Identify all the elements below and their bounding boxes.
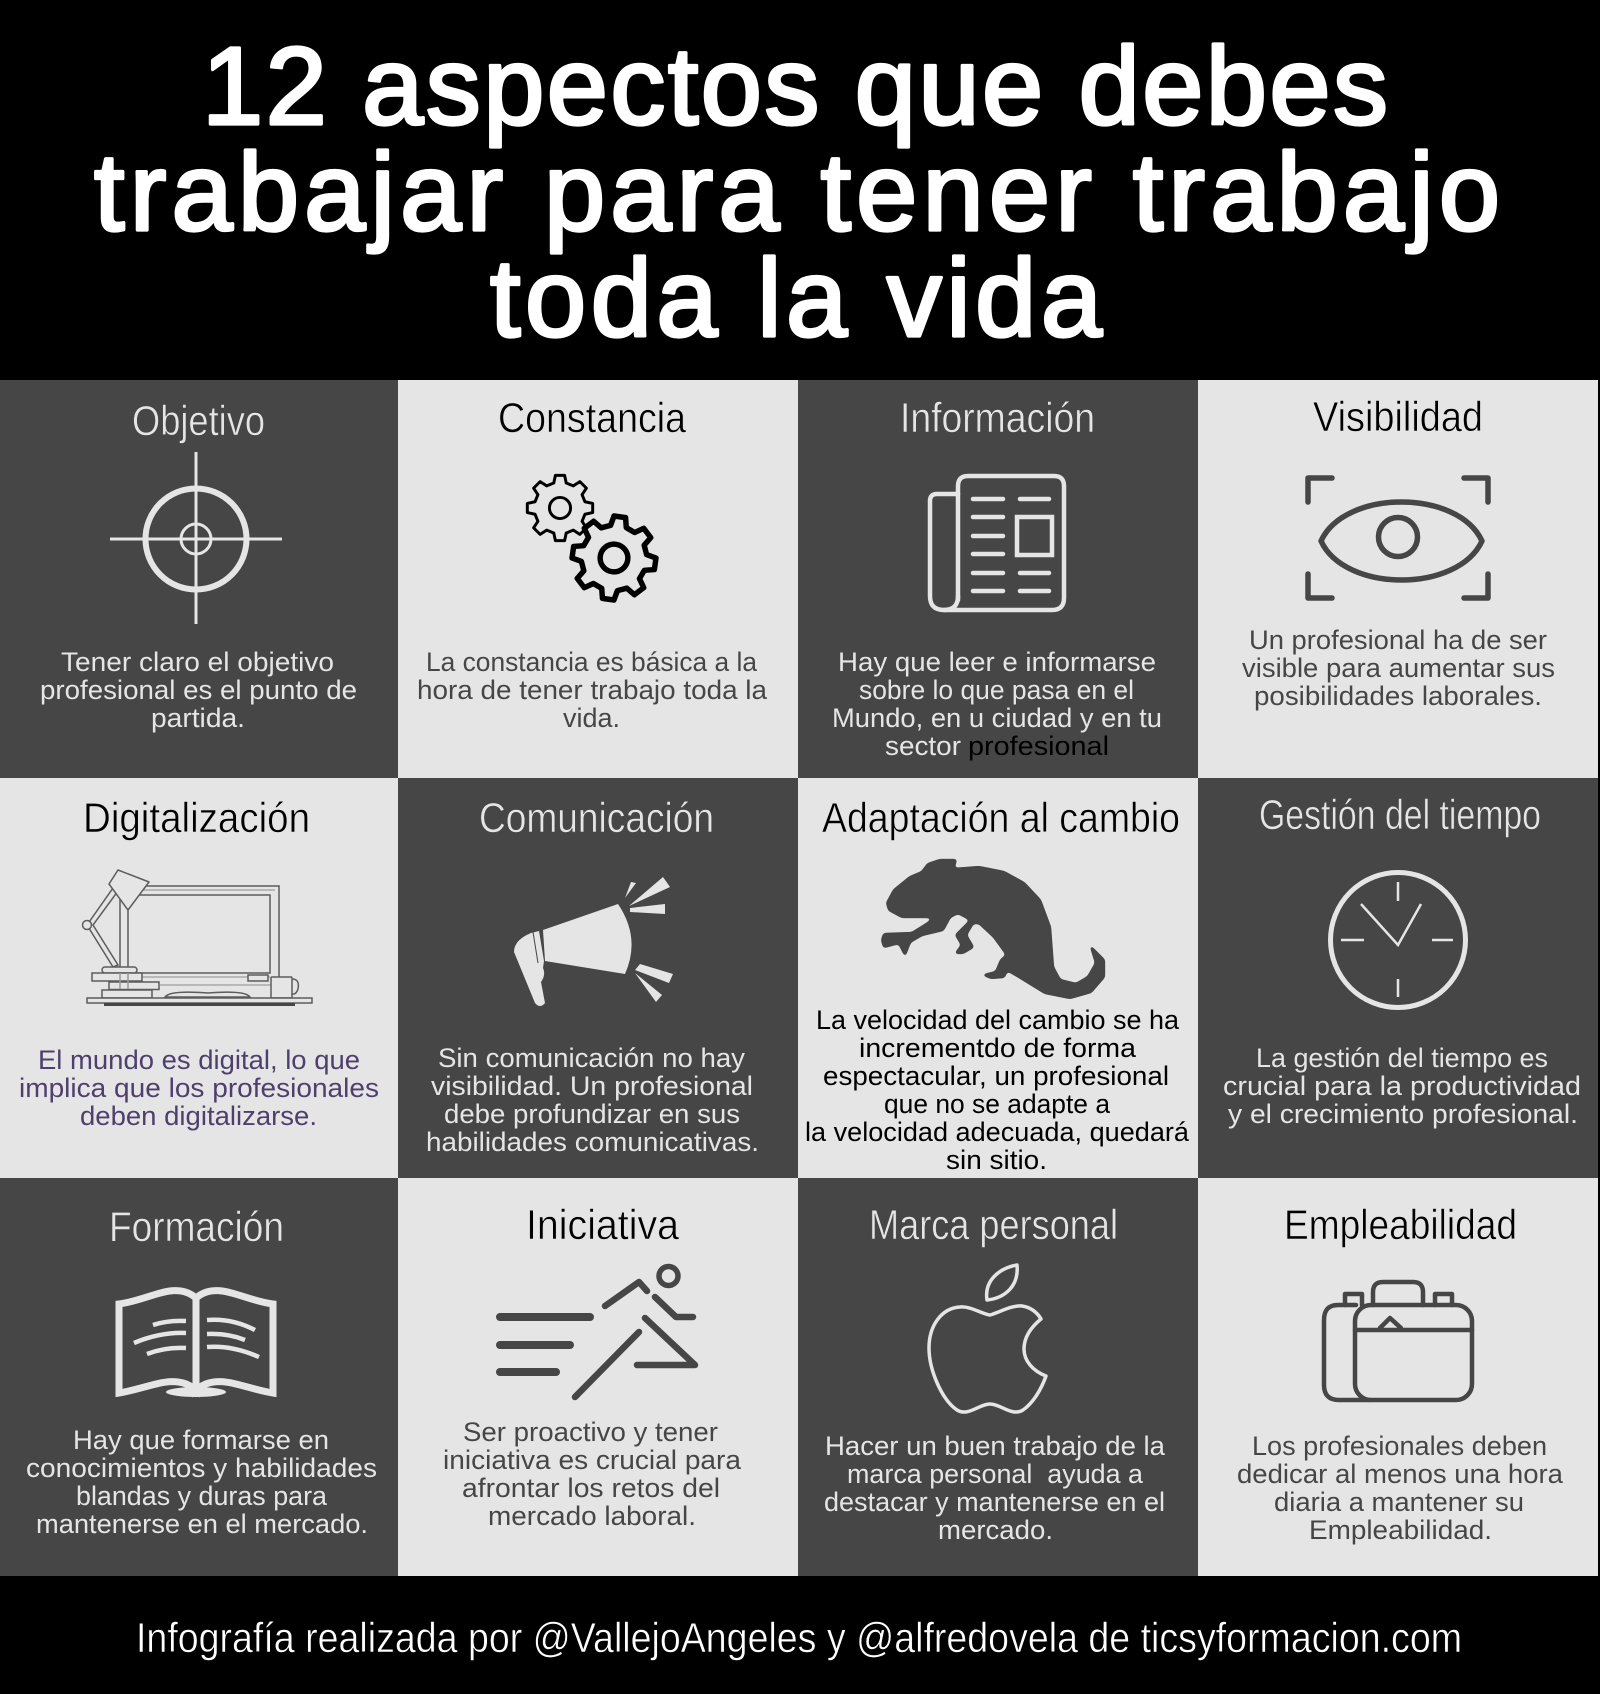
heading: Gestión del tiempo: Gestión del tiempo — [1259, 791, 1541, 838]
panel: Marca personal — [798, 1178, 1198, 1576]
text: Marca personal description: Hacer un buen trabajo de la — [825, 1431, 1166, 1461]
text: Marca personal description — [824, 1431, 1166, 1545]
panel: Adaptación al cambio — [798, 778, 1198, 1178]
text: Información description: sector — [885, 731, 961, 761]
text: Adaptación description: que no se adapte a — [884, 1089, 1111, 1119]
text: Digitalización description — [19, 1045, 379, 1131]
text: Empleabilidad description: diaria a mantener su — [1274, 1487, 1524, 1517]
panel: Gestión del tiempo — [1198, 778, 1598, 1178]
title: trabajar para tener trabajo — [94, 131, 1500, 254]
text: Adaptación description: La velocidad del cambio se ha — [816, 1005, 1180, 1035]
text: Adaptación description: la velocidad adecuada, quedará — [805, 1117, 1190, 1147]
text: Gestión description: La gestión del tiempo es — [1256, 1043, 1548, 1073]
text: Información description: Hay que leer e informarse — [838, 647, 1156, 677]
text: Iniciativa description: mercado laboral. — [488, 1501, 696, 1531]
text: Comunicación description: debe profundizar en sus — [444, 1099, 740, 1129]
footer credit: Infografía realizada por @VallejoAngeles y @alfredovela de ticsyformacion.com — [136, 1614, 1462, 1661]
panel: Digitalización — [0, 778, 398, 1178]
text: Constancia description: La constancia es básica a la — [426, 647, 758, 677]
panel: Formación — [0, 1178, 398, 1576]
text: Visibilidad description: posibilidades laborales. — [1254, 681, 1542, 711]
panel: Iniciativa — [398, 1178, 798, 1576]
text: Constancia description: hora de tener trabajo toda la — [417, 675, 768, 705]
text: Información description — [832, 647, 1162, 761]
heading: Formación: Formación — [109, 1203, 284, 1250]
text: Empleabilidad description: dedicar al menos una hora — [1237, 1459, 1564, 1489]
icon: apple — [929, 1265, 1046, 1412]
heading: Comunicación: Comunicación — [479, 794, 714, 841]
text: Información description: Mundo, en u ciudad y en tu — [832, 703, 1162, 733]
icon: eye in viewfinder — [1308, 478, 1488, 598]
text: Gestión description: crucial para la productividad — [1223, 1071, 1581, 1101]
text: Formación description: blandas y duras para — [76, 1481, 328, 1511]
text: Marca personal description: destacar y mantenerse en el — [824, 1487, 1165, 1517]
text: Iniciativa description: Ser proactivo y tener — [463, 1417, 718, 1447]
heading: Información: Información — [900, 394, 1095, 441]
text: Comunicación description — [426, 1043, 759, 1157]
text: Objetivo description: profesional es el punto de — [40, 675, 357, 705]
heading: Adaptación al cambio: Adaptación al cambio — [822, 794, 1180, 841]
icon: open book — [119, 1291, 273, 1397]
icon: target — [110, 452, 282, 624]
text: Comunicación description: Sin comunicación no hay — [438, 1043, 746, 1073]
text: Empleabilidad description: Los profesionales deben — [1252, 1431, 1547, 1461]
text: Adaptación description: sin sitio. — [946, 1145, 1047, 1175]
text: Marca personal description: marca personal ayuda a — [847, 1459, 1144, 1489]
panel: Comunicación — [398, 778, 798, 1178]
text: Formación description: conocimientos y habilidades — [26, 1453, 377, 1483]
text: Constancia description: vida. — [563, 703, 620, 733]
text: Gestión description: y el crecimiento profesional. — [1228, 1099, 1578, 1129]
text: Digitalización description: implica que los profesionales — [19, 1073, 379, 1103]
text: Formación description — [26, 1425, 377, 1539]
heading: Marca personal: Marca personal — [869, 1201, 1118, 1248]
text: Constancia description — [417, 647, 768, 733]
text: Iniciativa description: afrontar los retos del — [462, 1473, 720, 1503]
panel: Información — [798, 380, 1198, 778]
text: Gestión description — [1223, 1043, 1581, 1129]
text: Objetivo description: partida. — [151, 703, 245, 733]
icon: gears — [527, 475, 661, 605]
text: Visibilidad description — [1242, 625, 1555, 711]
text: Visibilidad description: visible para aumentar sus — [1242, 653, 1555, 683]
text: Iniciativa description — [443, 1417, 742, 1531]
text: Comunicación description: habilidades comunicativas. — [426, 1127, 759, 1157]
text: Digitalización description: deben digitalizarse. — [80, 1101, 317, 1131]
text: Empleabilidad description: Empleabilidad. — [1309, 1515, 1492, 1545]
icon: running person — [500, 1266, 695, 1397]
icon: newspaper — [930, 476, 1064, 610]
icon: chameleon — [882, 860, 1104, 998]
panel: Constancia — [398, 380, 798, 778]
text: Digitalización description: El mundo es digital, lo que — [38, 1045, 360, 1075]
text: Adaptación description: espectacular, un profesional — [823, 1061, 1169, 1091]
title — [94, 25, 1500, 360]
icon: desk with lamp and laptop — [82, 870, 312, 1006]
heading: Iniciativa: Iniciativa — [526, 1201, 680, 1248]
text: Formación description: mantenerse en el mercado. — [36, 1509, 368, 1539]
heading: Constancia: Constancia — [498, 394, 687, 441]
heading: Digitalización: Digitalización — [83, 794, 310, 841]
icon: briefcase — [1324, 1282, 1472, 1400]
text: Información description: profesional — [968, 731, 1109, 761]
heading: Visibilidad: Visibilidad — [1313, 393, 1483, 440]
icon: clock — [1330, 872, 1466, 1008]
panel: Empleabilidad — [1198, 1178, 1598, 1576]
text: Comunicación description: visibilidad. Un profesional — [431, 1071, 753, 1101]
icon: megaphone — [514, 877, 673, 1006]
text: Marca personal description: mercado. — [938, 1515, 1053, 1545]
text: Objetivo description — [40, 647, 357, 733]
title: 12 aspectos que debes — [202, 25, 1388, 148]
text: Objetivo description: Tener claro el objetivo — [61, 647, 334, 677]
text: Adaptación description — [805, 1005, 1190, 1175]
text: Adaptación description: incrementdo de forma — [859, 1033, 1137, 1063]
text: Formación description: Hay que formarse en — [73, 1425, 329, 1455]
heading: Objetivo: Objetivo — [132, 397, 265, 444]
panel: Visibilidad — [1198, 380, 1598, 778]
text: Información description: sobre lo que pasa en el — [859, 675, 1134, 705]
text: Visibilidad description: Un profesional ha de ser — [1249, 625, 1547, 655]
title: toda la vida — [490, 237, 1103, 360]
heading: Empleabilidad: Empleabilidad — [1284, 1201, 1517, 1248]
text: Empleabilidad description — [1237, 1431, 1564, 1545]
panel: Objetivo — [0, 380, 398, 778]
text: Iniciativa description: iniciativa es crucial para — [443, 1445, 742, 1475]
